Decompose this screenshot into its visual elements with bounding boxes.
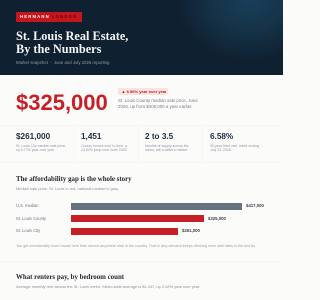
logo badge: LONDON xyxy=(52,14,77,18)
section heading: renters: What renters pay, by bedroom count xyxy=(16,274,124,280)
stat: months of supply xyxy=(145,132,189,152)
stat: homes sold: County homes sold in June, a xyxy=(81,144,127,148)
stat: homes sold: 13.82% jump over June 2025 xyxy=(81,148,127,152)
stat: mortgage rate: 6.58% xyxy=(210,132,233,141)
hero description: St. Louis County median sale price, June xyxy=(118,98,198,102)
change badge xyxy=(118,88,168,95)
logo badge: HERMANN xyxy=(20,14,50,18)
bar: U.S. median: U.S. median xyxy=(16,203,39,208)
stat: city price: St. Louis City median sale price, xyxy=(16,144,66,148)
bar: U.S. median xyxy=(16,203,264,210)
stat: homes sold xyxy=(81,132,128,152)
title: By the Numbers xyxy=(16,42,101,56)
subtitle: Market snapshot · June and July 2026 reporting xyxy=(16,60,109,64)
stat: mortgage rate: 30-year fixed rate, week ending xyxy=(210,144,259,148)
stat: months of supply: 2 to 3.5 xyxy=(145,132,173,141)
bar: St. Louis County: St. Louis County xyxy=(16,216,46,220)
stat: months of supply: metro, still a seller's market xyxy=(145,148,187,152)
stat: homes sold: 1,451 xyxy=(81,132,102,141)
stat: city price xyxy=(16,132,66,152)
stat: city price: up 5.77% year over year xyxy=(16,148,54,152)
logo badge xyxy=(16,12,82,22)
section subtitle: renters: Average monthly rent across the St. Louis metro. Metro-wide average is $1,437, up 2.62% year over year. xyxy=(16,284,200,288)
stat: mortgage rate xyxy=(210,132,259,152)
section heading: affordability: The affordability gap is the whole story xyxy=(16,176,132,182)
hero figure: $325,000 xyxy=(16,90,108,114)
section subtitle: affordability: Median sale price. St. Louis in red, national median in gray. xyxy=(16,186,119,190)
title xyxy=(16,28,128,56)
bar: U.S. median: $417,000 xyxy=(246,203,264,208)
bar: St. Louis County xyxy=(16,215,226,222)
title: St. Louis Real Estate, xyxy=(16,28,128,42)
bar: St. Louis City: $261,000 xyxy=(182,228,200,233)
stat: months of supply: Months of supply across the xyxy=(145,144,189,148)
bar: St. Louis County: $325,000 xyxy=(208,216,226,220)
hero description: 2026, up from $305,000 a year earlier. xyxy=(118,104,192,109)
change badge: ▲ 6.56% year over year xyxy=(122,89,167,94)
hero description xyxy=(118,98,198,109)
chart note: You get considerably more house here than almost anywhere else in the country. That is why demand keeps climbing even with rates in the mid-6s. xyxy=(16,244,256,248)
header panel xyxy=(0,0,283,75)
bar chart xyxy=(16,203,264,235)
bar: St. Louis City: St. Louis City xyxy=(16,228,40,233)
stat: mortgage rate: July 23, 2026 xyxy=(210,148,231,152)
stat: city price: $261,000 xyxy=(16,132,50,141)
bar: St. Louis City xyxy=(16,228,200,235)
